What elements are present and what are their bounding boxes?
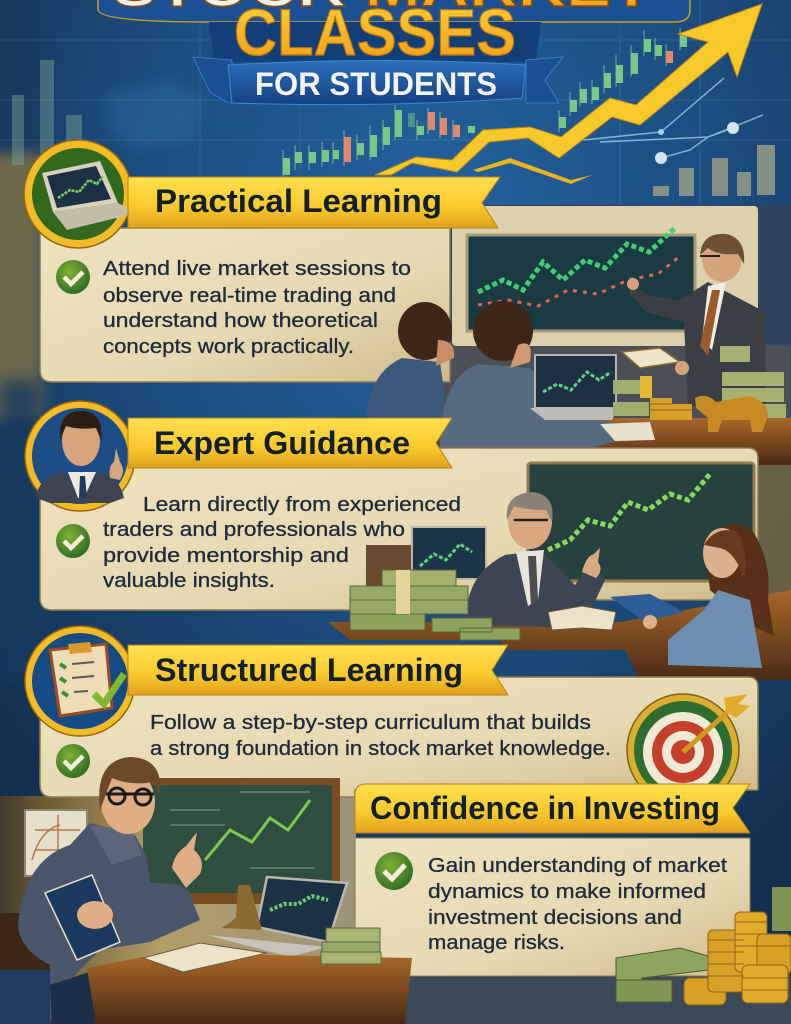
panel 1: practical learning: [24, 140, 791, 465]
yellow header: [128, 177, 500, 228]
student left: [366, 302, 454, 418]
desk: [328, 590, 791, 680]
body text: provide mentorship and: [103, 544, 349, 567]
cream text panel: [40, 677, 758, 797]
title: top banner: [98, 0, 690, 22]
yellow header: [355, 784, 750, 833]
desk: [87, 955, 412, 1024]
arrow: [375, 4, 762, 184]
body text: investment decisions and: [428, 906, 682, 929]
laptop: [207, 877, 347, 957]
woman: [610, 524, 774, 668]
body text: Attend live market sessions to: [103, 257, 411, 280]
check icon: [56, 524, 90, 558]
yellow header: [128, 418, 452, 468]
check icon: [56, 744, 90, 778]
presenter: [466, 492, 605, 628]
body text: traders and professionals who: [103, 518, 405, 541]
body text: Follow a step-by-step curriculum that builds: [150, 711, 591, 734]
warm wall behind student: [0, 796, 356, 1024]
body text: valuable insights.: [103, 569, 275, 592]
bull figurine: [695, 396, 768, 432]
yellow header: Structured Learning: [155, 652, 463, 688]
panel 3: structured learning: [25, 626, 758, 806]
student right: [440, 301, 622, 447]
title: for students ribbon: [193, 57, 563, 105]
body text: Gain understanding of market: [428, 854, 727, 877]
student: [18, 757, 202, 1024]
body text: dynamics to make informed: [428, 880, 706, 903]
body text: [428, 854, 727, 954]
chart board: [528, 463, 754, 581]
check icon: [56, 260, 90, 294]
cream text panel: [355, 838, 750, 976]
body text: manage risks.: [428, 931, 565, 954]
whiteboard with chart: [452, 206, 758, 346]
check icon: [375, 852, 413, 890]
teacher: [622, 234, 766, 406]
open book: [143, 943, 267, 972]
coins and cash: [616, 887, 791, 1005]
icon: expert portrait: [25, 401, 135, 511]
panel 4: confidence in investing: [355, 784, 791, 1005]
body text: [103, 493, 461, 592]
title: for students ribbon: FOR STUDENTS: [255, 66, 497, 102]
yellow header: Expert Guidance: [154, 425, 410, 461]
student scene: [0, 757, 412, 1024]
candlestick chart: [283, 28, 763, 180]
cream text panel: [40, 448, 758, 610]
wall map: [25, 810, 87, 876]
small monitor: [366, 527, 486, 590]
chalkboard: [143, 778, 340, 904]
icon: clipboard: [25, 626, 135, 736]
body text: [103, 257, 411, 358]
body text: a strong foundation in stock market knowledge.: [150, 737, 611, 760]
cash stack: [321, 928, 381, 964]
desk: [430, 418, 791, 465]
open book: [548, 606, 616, 630]
body text: [150, 711, 611, 760]
body text: observe real-time trading and: [103, 284, 396, 307]
body text: concepts work practically.: [103, 335, 354, 358]
body text: understand how theoretical: [103, 309, 378, 332]
icon: target: [627, 694, 750, 806]
yellow header: [128, 645, 508, 695]
table statue: [222, 885, 262, 930]
shadow furniture left: [0, 913, 60, 1024]
scene background: [440, 205, 791, 465]
cream text panel: [40, 228, 450, 382]
yellow header: Practical Learning: [155, 183, 442, 219]
panel 2: expert guidance: [25, 401, 791, 680]
cash stack: [350, 570, 520, 640]
body text: Learn directly from experienced: [143, 493, 461, 516]
icon: laptop: [24, 140, 137, 248]
yellow header: Confidence in Investing: [370, 790, 720, 826]
laptop: [530, 355, 655, 441]
money and coins: [613, 346, 786, 420]
